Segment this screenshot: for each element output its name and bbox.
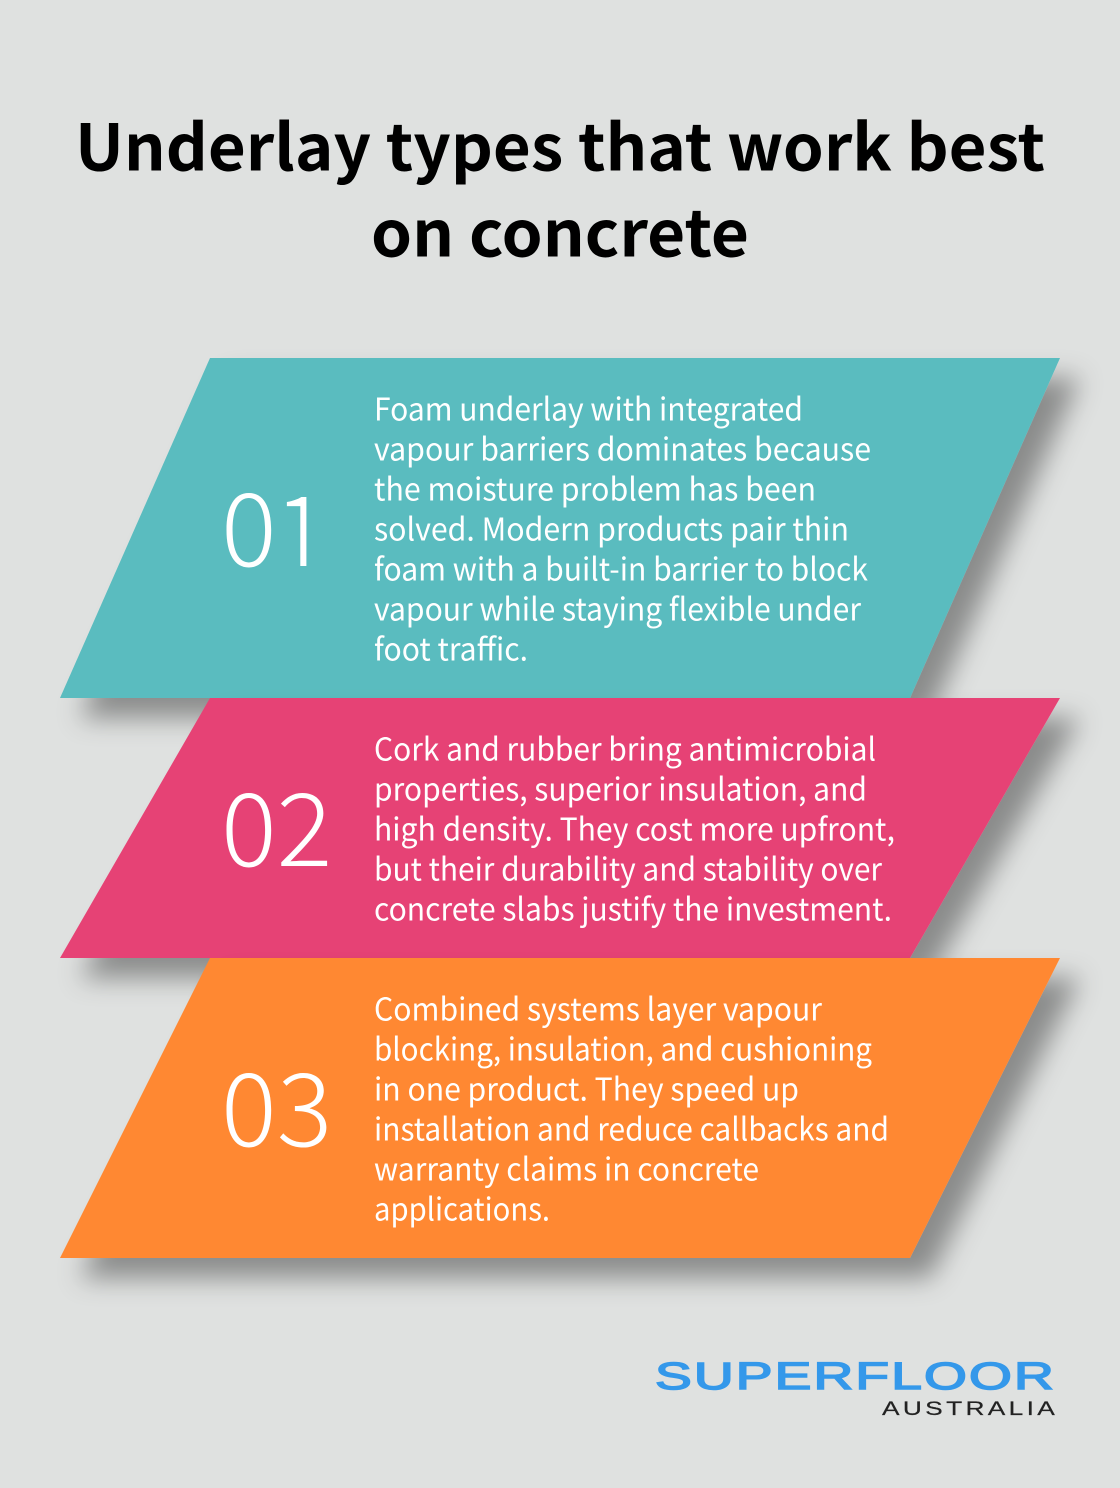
title: on concrete — [371, 184, 749, 276]
teal parallelogram — [60, 358, 1060, 698]
body text 02 — [374, 724, 895, 930]
panel: 02 cork and rubber — [60, 698, 1060, 958]
title — [75, 98, 1045, 276]
logo: Superfloor Australia — [655, 1355, 1055, 1419]
number 01 — [221, 449, 342, 603]
body text 01: vapour while staying flexible under — [374, 584, 862, 630]
body text 03: applications. — [374, 1184, 550, 1230]
title: Underlay types that work best — [75, 98, 1045, 190]
body text 03: warranty claims in concrete — [374, 1144, 759, 1190]
body text 02: high density. They cost more upfront, — [374, 804, 895, 850]
body text 03 — [374, 984, 889, 1230]
pink parallelogram — [60, 698, 1060, 958]
panel: 03 combined systems — [60, 958, 1060, 1258]
logo: Superfloor Australia: AUSTRALIA — [882, 1397, 1055, 1419]
body text 02: concrete slabs justify the investment. — [374, 884, 892, 930]
number 03: 03 — [221, 1029, 332, 1176]
body text 03: blocking, insulation, and cushioning — [374, 1024, 872, 1070]
logo: Superfloor Australia: SUPERFLOOR — [655, 1355, 1054, 1398]
body text 03: Combined systems layer vapour — [374, 984, 823, 1030]
number 01: 0 — [221, 449, 277, 596]
orange parallelogram — [60, 958, 1060, 1258]
body text 01: foam with a built-in barrier to block — [374, 544, 869, 590]
body text 02: but their durability and stability over — [374, 844, 883, 890]
body text 01: vapour barriers dominates because — [374, 424, 871, 470]
body text 03: installation and reduce callbacks and — [374, 1104, 889, 1150]
body text 02: Cork and rubber bring antimicrobial — [374, 724, 876, 770]
panel: 01 foam underlay — [60, 358, 1060, 698]
body text 01: Foam underlay with integrated — [374, 384, 803, 430]
body text 01: the moisture problem has been — [374, 464, 816, 510]
body text 01: solved. Modern products pair thin — [374, 504, 849, 550]
body text 02: properties, superior insulation, and — [374, 764, 867, 810]
body text 01 — [374, 384, 871, 670]
number 02: 02 — [221, 749, 332, 896]
body text 03: in one product. They speed up — [374, 1064, 799, 1110]
number 01: 1 — [274, 450, 329, 603]
body text 01: foot traffic. — [374, 624, 528, 670]
